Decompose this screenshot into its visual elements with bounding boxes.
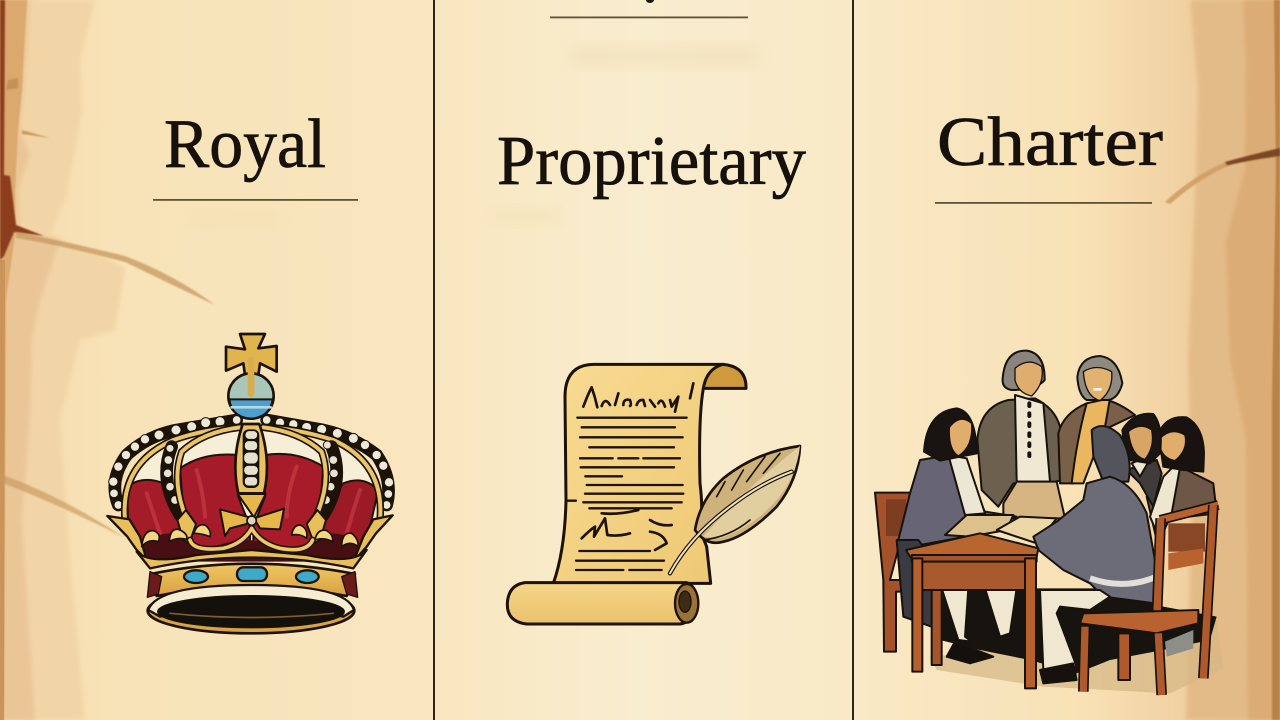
cross and orb [226, 334, 277, 375]
scroll lines [566, 418, 687, 570]
standing man right [1058, 400, 1135, 483]
gold arches [125, 427, 240, 520]
right bands [1186, 0, 1280, 720]
crease left bottom [0, 474, 125, 538]
pearls [142, 525, 358, 547]
velvet shadows [140, 533, 360, 562]
rule and cut-off mark at top [550, 0, 748, 18]
panel: proprietary [497, 0, 806, 624]
panel: royal [107, 106, 394, 633]
seated man left [898, 455, 1017, 545]
map on table [997, 517, 1057, 543]
beads outer [115, 420, 389, 505]
seated man far right [1147, 467, 1217, 540]
crease left top [16, 232, 215, 305]
dark under-table mass [937, 588, 1217, 673]
red velvet [127, 480, 190, 563]
rule under Charter [935, 202, 1152, 204]
heading: Charter: Charter [937, 104, 1163, 181]
centre arch [235, 424, 267, 493]
inner bead arches [167, 447, 337, 515]
icon: scroll with quill [507, 364, 800, 624]
heading: Proprietary: Proprietary [497, 123, 806, 200]
quill [695, 446, 800, 543]
cream interior behind arches [127, 430, 378, 553]
faint mottling [570, 46, 760, 66]
panel: charter [875, 104, 1223, 695]
icon: crown [107, 334, 394, 633]
gold posts and corners [107, 516, 147, 560]
rule under Royal [153, 199, 358, 201]
gold scallops [190, 528, 313, 550]
back-facing man [1092, 426, 1130, 482]
divider left [433, 0, 435, 720]
table [906, 533, 1038, 560]
brim [148, 588, 354, 633]
bottom roll [507, 583, 696, 624]
centre bow [238, 494, 266, 517]
right chair [1080, 505, 1218, 695]
divider right [852, 0, 854, 720]
illustration: founders around table [875, 351, 1223, 695]
dark torn edge [0, 0, 44, 260]
gold band [151, 564, 355, 596]
seated man behind right [1127, 460, 1162, 507]
standing man left [977, 398, 1062, 507]
left chair [875, 493, 910, 652]
upper rim [137, 550, 367, 568]
heading: Royal: Royal [164, 106, 326, 183]
ground shadow [930, 620, 1223, 693]
